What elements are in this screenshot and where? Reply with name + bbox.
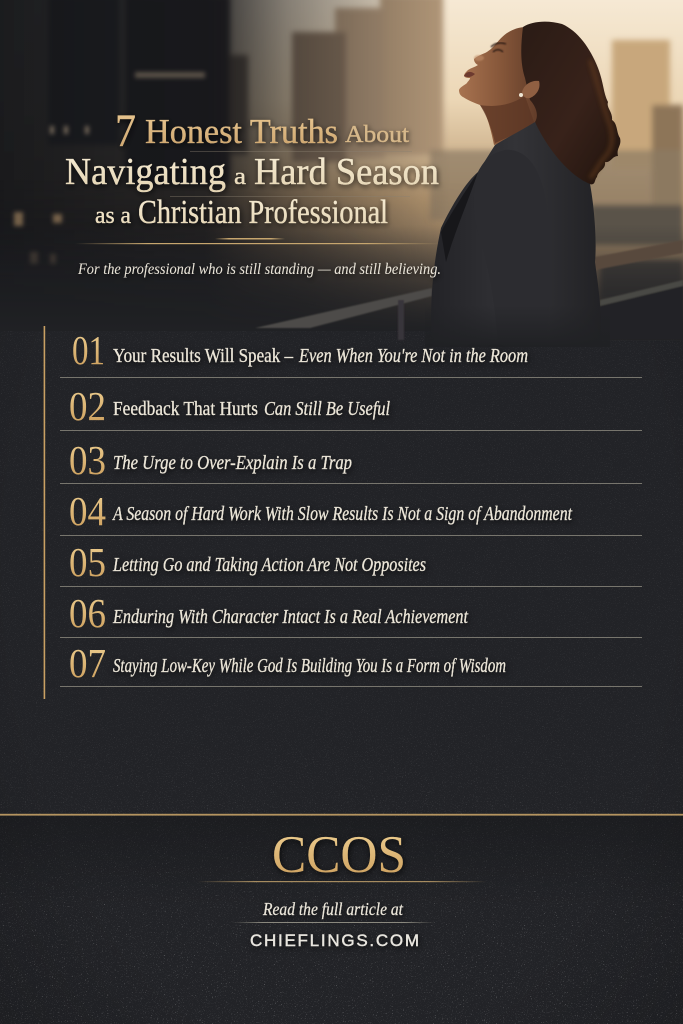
jacket fade into slate [425, 305, 610, 347]
title line 3: Christian Professional [138, 194, 388, 231]
lapel [441, 172, 478, 262]
truth 07: Staying Low-Key While God Is Building You Is a Form of Wisdom [113, 656, 506, 677]
truth 07: 07 [69, 640, 106, 686]
logo divider [197, 881, 487, 882]
truth 01: 01 [72, 327, 105, 373]
truth 02: Can Still Be Useful [264, 399, 390, 420]
jaw shadow [480, 96, 535, 143]
title line 1: Honest Truths [145, 112, 338, 151]
title line 2 [65, 151, 439, 193]
earring [519, 93, 523, 97]
neck and face [459, 27, 545, 145]
footer logo: CCOS: CCOS [272, 826, 406, 884]
title line 2: a [234, 164, 246, 190]
truth 05: Letting Go and Taking Action Are Not Opposites [112, 555, 426, 576]
truth 04: 04 [69, 488, 106, 534]
title line 3: as a [95, 203, 131, 229]
list accent bar [44, 326, 45, 699]
title dividers [75, 151, 440, 244]
hair highlights [590, 60, 612, 178]
title line 2: Navigating [65, 151, 226, 193]
call to action divider [232, 922, 435, 923]
truth 05 [60, 539, 642, 586]
title line 1 [115, 105, 409, 157]
truth 03: The Urge to Over-Explain Is a Trap [113, 453, 352, 474]
fade from photo to slate [0, 225, 683, 331]
truth 03: 03 [69, 437, 106, 483]
truth 02: 02 [69, 383, 106, 429]
list: seven truths [60, 327, 642, 686]
title line 1: 7 [115, 105, 136, 157]
figure: woman looking upward [425, 22, 620, 347]
ear [522, 81, 540, 98]
truth 01: Even When You're Not in the Room [298, 346, 528, 367]
title line 2: Hard Season [254, 151, 439, 193]
truth 01 [60, 327, 642, 378]
title line 1: About [345, 122, 409, 148]
truth 04 [60, 488, 642, 536]
jacket sleeve [474, 150, 549, 345]
footer URL: CHIEFLINGS.COM [250, 931, 419, 950]
title [65, 105, 439, 231]
truth 05: 05 [69, 539, 106, 585]
footer call to action: Read the full article at [262, 899, 404, 919]
truth 02: Feedback That Hurts [113, 399, 258, 420]
tagline: For the professional who is still standing — and still believing. [77, 261, 441, 278]
truth 02 [60, 383, 642, 430]
photo: hazy city skyline at sunrise [0, 0, 683, 330]
nose highlight [474, 55, 484, 61]
railing [255, 240, 683, 340]
truth 01: Your Results Will Speak – [113, 346, 293, 367]
footer gold divider [0, 814, 683, 816]
truth 06: Enduring With Character Intact Is a Real Achievement [112, 607, 468, 628]
truth 04: A Season of Hard Work With Slow Results Is Not a Sign of Abandonment [111, 504, 572, 525]
eye and brow [491, 43, 506, 52]
truth 03 [60, 437, 642, 484]
hair [521, 22, 620, 185]
background: dark textured slate [0, 331, 683, 1024]
jacket [431, 122, 601, 345]
truth 07 [60, 640, 642, 686]
truth 06 [60, 590, 642, 638]
lips [464, 72, 475, 77]
truth 06: 06 [69, 590, 106, 636]
